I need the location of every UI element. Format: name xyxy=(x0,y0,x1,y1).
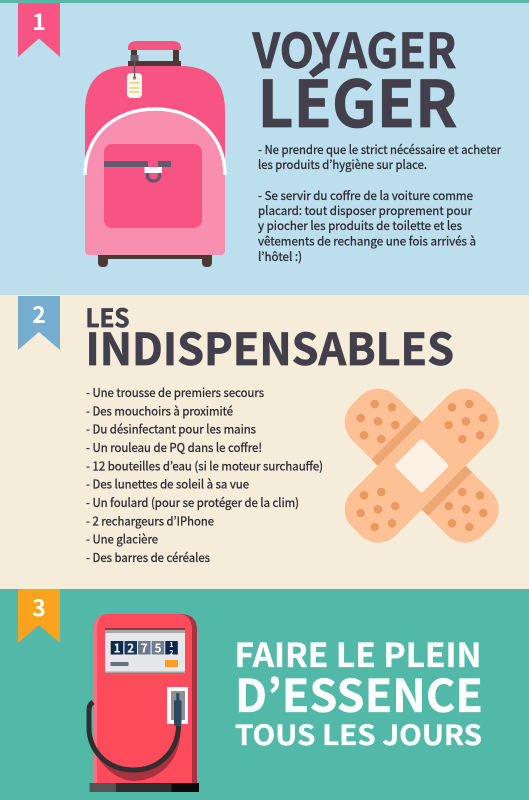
meter xyxy=(105,628,185,673)
ribbon: number 3 xyxy=(18,589,60,643)
meter: 7 xyxy=(141,640,148,656)
ribbon: number 1: 1 xyxy=(32,3,46,37)
panel: les indispensables xyxy=(0,295,529,589)
nozzle holder xyxy=(167,687,188,726)
title: les indispensables: INDISPENSABLES xyxy=(86,314,454,378)
list: essentials: - Un foulard (pour se protéger de la clim) xyxy=(86,493,299,511)
ribbon: number 2 xyxy=(18,296,60,350)
list: essentials: - Des barres de céréales xyxy=(86,548,210,566)
text block: advice: - Se servir du coffre de la voiture comme xyxy=(258,186,473,204)
icon: pink suitcase xyxy=(85,41,225,267)
hose xyxy=(89,702,178,770)
meter: 5 xyxy=(154,640,162,656)
text block: advice: placard: tout disposer proprement pour xyxy=(258,201,472,219)
meter: 2 xyxy=(169,648,174,658)
panel: faire le plein xyxy=(0,589,529,800)
ribbon: number 2: 2 xyxy=(32,296,46,330)
text block: advice: - Ne prendre que le strict nécéssaire et acheter xyxy=(258,140,501,158)
list: essentials xyxy=(86,383,323,566)
title: faire le plein: FAIRE LE PLEIN xyxy=(234,629,482,677)
panel: voyager leger xyxy=(0,0,529,295)
list: essentials: - Des lunettes de soleil à sa vue xyxy=(86,475,249,493)
meter: 2 xyxy=(127,640,134,656)
ribbon: number 3: 3 xyxy=(32,589,46,623)
list: essentials: - 12 bouteilles d’eau (si le moteur surchauffe) xyxy=(86,456,323,474)
list: essentials: - Du désinfectant pour les mains xyxy=(86,420,256,438)
text block: advice: l’hôtel :) xyxy=(258,247,302,265)
title: voyager leger: LÉGER xyxy=(258,54,458,146)
title: voyager leger: VOYAGER xyxy=(252,12,456,82)
title: les indispensables: LES xyxy=(86,299,130,335)
ribbon: number 1 xyxy=(18,3,60,57)
meter: 1 xyxy=(169,640,174,650)
text block: advice xyxy=(258,140,501,265)
title: faire le plein xyxy=(234,629,483,753)
base xyxy=(90,783,199,792)
text block: advice: vêtements de rechange une fois arrivés à xyxy=(258,232,476,250)
list: essentials: - Des mouchoirs à proximité xyxy=(86,401,233,419)
list: essentials: - 2 rechargeurs d’IPhone xyxy=(86,511,214,529)
icon: crossed bandages xyxy=(334,378,509,553)
meter: 1 xyxy=(113,640,121,656)
text block: advice: y piocher les produits de toilette et les xyxy=(258,216,462,234)
list: essentials: - Une glacière xyxy=(86,530,158,548)
title: faire le plein: TOUS LES JOURS xyxy=(235,713,482,753)
list: essentials: - Un rouleau de PQ dans le coffre! xyxy=(86,438,262,456)
text block: advice: les produits d’hygiène sur place. xyxy=(258,155,427,173)
title: faire le plein: D’ESSENCE xyxy=(235,660,483,725)
title: voyager leger xyxy=(252,12,458,146)
list: essentials: - Une trousse de premiers secours xyxy=(86,383,264,401)
icon: fuel pump xyxy=(89,614,199,792)
